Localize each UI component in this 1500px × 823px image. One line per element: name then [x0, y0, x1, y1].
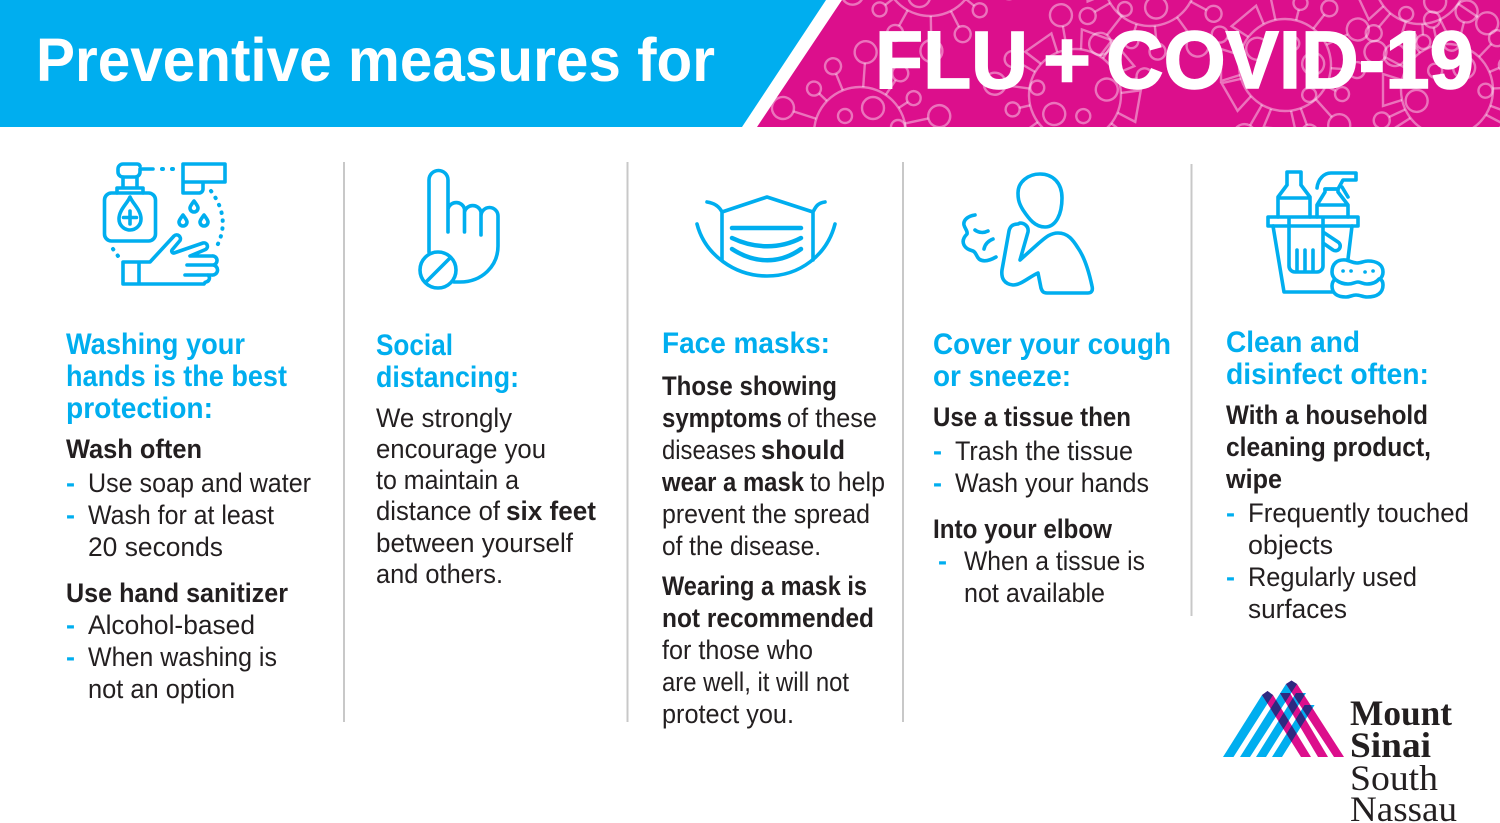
text block: wash often: Wash often	[66, 434, 202, 464]
text block: symptoms: of the disease.	[662, 531, 821, 561]
heading: clean and disinfect: Clean and	[1226, 326, 1360, 359]
text block: wash often: Use soap and water	[88, 468, 311, 498]
text block: wipe surfaces: Regularly used	[1248, 562, 1417, 592]
text block: wash often: -	[66, 500, 75, 530]
text block: six feet guidance: encourage you	[376, 434, 546, 464]
text block: use hand sanitizer: Use hand sanitizer	[66, 578, 288, 608]
icon: cleaning bucket	[1268, 172, 1383, 297]
text block: wash often: -	[66, 468, 75, 498]
text block: six feet guidance: six feet	[506, 496, 596, 526]
icon: surgical mask	[697, 197, 835, 276]
title left: Preventive measures for	[36, 26, 715, 94]
text block: six feet guidance: to maintain a	[376, 465, 520, 495]
heading: face masks: Face masks:	[662, 327, 830, 360]
text block: wipe surfaces	[1225, 400, 1469, 624]
title right: COVID-19	[1106, 15, 1474, 106]
title right	[875, 15, 1474, 106]
text block: symptoms: symptoms	[662, 403, 782, 433]
text block: symptoms: should	[761, 435, 845, 465]
text block: into your elbow: -	[938, 546, 947, 576]
pink virus pattern band	[757, 0, 1500, 127]
text block: wipe surfaces: wipe	[1225, 464, 1282, 494]
text block: wipe surfaces: -	[1226, 562, 1235, 592]
panel: cover your cough	[933, 174, 1171, 608]
text block: not recommended: not recommended	[662, 603, 874, 633]
text block: symptoms: wear a mask	[661, 467, 804, 497]
logo: Mount Sinai South Nassau	[1223, 680, 1457, 823]
text block: six feet guidance	[376, 403, 596, 589]
text block: use a tissue: Wash your hands	[955, 468, 1149, 498]
logo mark	[1223, 680, 1344, 757]
text block: symptoms: of these	[787, 403, 877, 433]
text block: wipe surfaces: surfaces	[1248, 594, 1347, 624]
text block: wash often: Wash for at least	[88, 500, 274, 530]
text block: six feet guidance: distance of	[376, 496, 500, 526]
text block: wipe surfaces: objects	[1248, 530, 1333, 560]
icon: soap, tap and hand	[104, 164, 225, 284]
header banner	[0, 0, 1500, 127]
text block: not recommended: are well, it will not	[662, 667, 849, 697]
panel: social distancing	[376, 170, 596, 589]
title right: FLU	[875, 15, 1028, 106]
text block: use a tissue: Trash the tissue	[955, 436, 1133, 466]
heading: washing your hands: Washing your	[66, 328, 245, 361]
text block: six feet guidance: and others.	[376, 559, 503, 589]
panel: clean and disinfect	[1225, 172, 1469, 624]
heading: clean and disinfect: disinfect often:	[1226, 358, 1429, 391]
text block: wipe surfaces: -	[1226, 498, 1235, 528]
panel: face masks	[661, 197, 885, 729]
text block: wash often: 20 seconds	[88, 532, 223, 562]
text block: wipe surfaces: With a household	[1226, 400, 1428, 430]
text block: not recommended	[662, 571, 874, 729]
text block: use hand sanitizer: -	[66, 642, 75, 672]
text block: into your elbow: When a tissue is	[964, 546, 1145, 576]
text block: symptoms: to help	[810, 467, 885, 497]
text block: use a tissue	[933, 402, 1149, 498]
text block: use hand sanitizer: not an option	[88, 674, 235, 704]
text block: symptoms: diseases	[662, 435, 756, 465]
text block: use a tissue: -	[933, 468, 942, 498]
heading: cover your cough: Cover your cough	[933, 328, 1171, 361]
logo text: Mount	[1350, 693, 1452, 733]
dividers	[344, 162, 1192, 722]
text block: use hand sanitizer: When washing is	[88, 642, 277, 672]
heading: social distancing: distancing:	[376, 361, 519, 394]
text block: six feet guidance: We strongly	[376, 403, 512, 433]
text block: not recommended: protect you.	[662, 699, 794, 729]
icon: raised finger with no sign	[420, 170, 498, 288]
text block: not recommended: Wearing a mask is	[662, 571, 867, 601]
heading: social distancing: Social	[376, 329, 453, 362]
icon: person coughing into elbow	[963, 174, 1092, 293]
text block: wipe surfaces: Frequently touched	[1248, 498, 1469, 528]
heading: cover your cough	[933, 328, 1171, 393]
blue title band	[0, 0, 826, 127]
logo text: Sinai	[1350, 725, 1431, 765]
text block: use a tissue: -	[933, 436, 942, 466]
heading: cover your cough: or sneeze:	[933, 360, 1071, 393]
panel: washing hands	[66, 164, 311, 704]
text block: into your elbow: not available	[964, 578, 1105, 608]
text block: into your elbow	[933, 514, 1145, 608]
text block: use hand sanitizer: Alcohol-based	[88, 610, 255, 640]
heading: social distancing	[376, 329, 519, 394]
heading: washing your hands: protection:	[66, 392, 213, 425]
text block: wipe surfaces: cleaning product,	[1226, 432, 1431, 462]
logo text: South	[1350, 758, 1438, 798]
heading: clean and disinfect	[1226, 326, 1429, 391]
text block: symptoms: Those showing	[662, 371, 837, 401]
text block: into your elbow: Into your elbow	[933, 514, 1112, 544]
text block: wash often	[66, 434, 311, 562]
text block: use hand sanitizer: -	[66, 610, 75, 640]
text block: symptoms: prevent the spread	[662, 499, 870, 529]
text block: use hand sanitizer	[66, 578, 288, 704]
text block: not recommended: for those who	[662, 635, 813, 665]
text block: six feet guidance: between yourself	[376, 528, 573, 558]
logo text	[1350, 693, 1457, 823]
heading: washing your hands: hands is the best	[66, 360, 287, 393]
text block: symptoms	[661, 371, 885, 561]
heading: washing your hands	[66, 328, 287, 425]
title right: +	[1043, 15, 1091, 106]
text block: use a tissue: Use a tissue then	[933, 402, 1131, 432]
